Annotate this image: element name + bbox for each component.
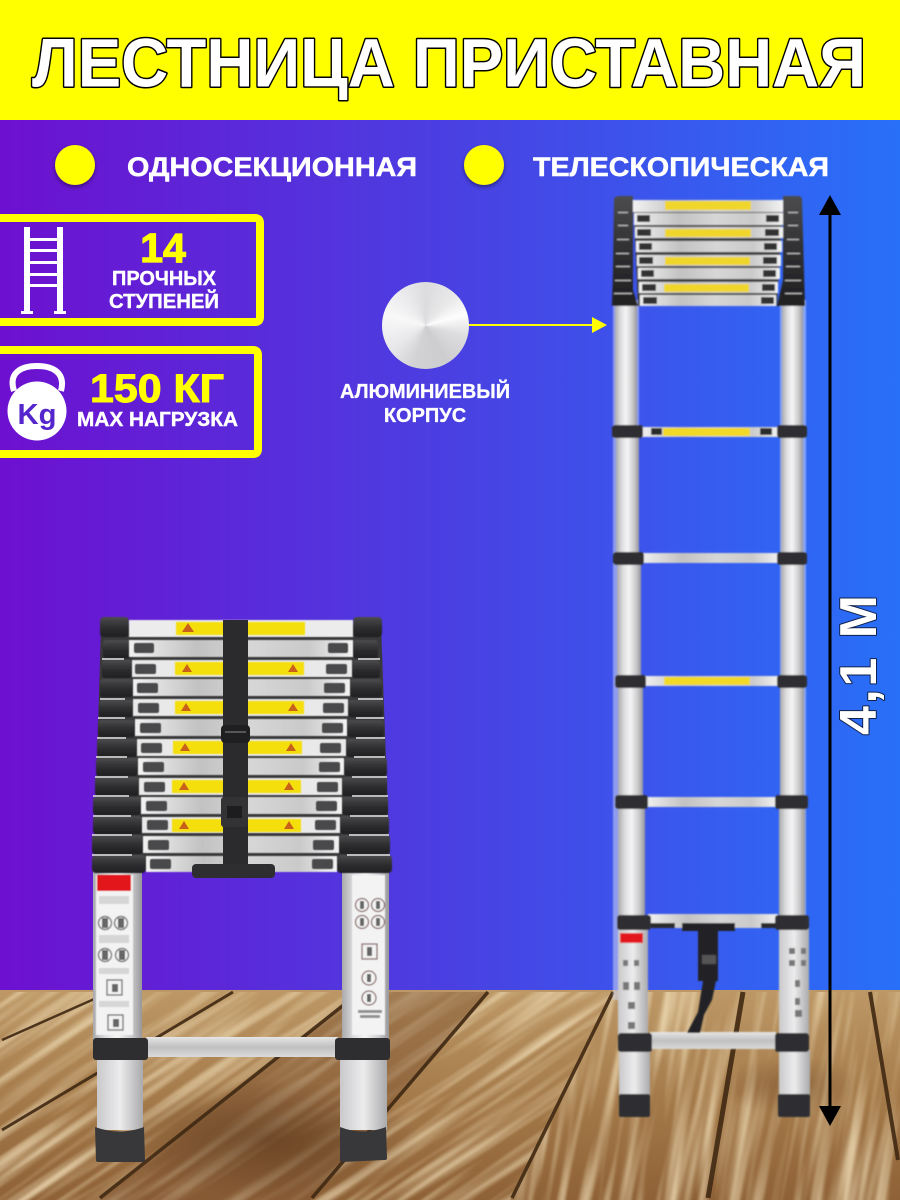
lower tubes [97,1058,387,1130]
title: ЛЕСТНИЦА ПРИСТАВНАЯ [32,24,866,102]
safety labels: right tube [352,875,385,1035]
dark backing behind the folded stack [94,625,390,870]
callout label: aluminium body: АЛЮМИНИЕВЫЙ [340,379,510,403]
icon: kettlebell [8,366,66,440]
top folded stack of rungs [612,196,805,306]
white outline glow [613,300,806,1000]
panel: 14 steps [0,218,260,322]
yellow warning stickers [172,622,305,832]
option: single section [55,145,417,185]
folded ladder (left) [92,617,392,1162]
safety labels: left tube [96,875,133,1035]
safety labels [620,933,806,1029]
clamps [612,425,809,1052]
callout label: aluminium body: КОРПУС [384,405,466,427]
cap highlights [92,658,390,856]
height dimension arrow [819,195,841,1126]
height label: 4,1 М [830,595,888,735]
clamps [93,1038,390,1060]
hanging strap [682,923,735,1033]
lower rung [650,1032,776,1049]
wooden floor [0,990,900,1200]
rungs [640,427,780,928]
option: single section: ОДНОСЕКЦИОННАЯ [127,152,417,182]
callout label: aluminium body [340,379,510,427]
rungs [129,620,353,872]
tubes [615,305,810,1095]
rung grips [134,643,348,869]
side caps left [92,617,146,873]
label: max load: МАХ НАГРУЗКА [77,409,238,431]
rubber feet [619,1094,810,1117]
carrying strap with buckles and handle [192,620,275,878]
label: strong steps: СТУПЕНЕЙ [109,289,219,313]
option: telescopic [464,145,829,185]
icon: ladder [21,227,66,314]
label: strong steps [109,268,219,313]
yellow stickers on rungs [663,428,750,685]
number 14: 14 [140,225,186,271]
bottom crossbar [146,1037,338,1057]
label: strong steps: ПРОЧНЫХ [112,268,217,290]
warning triangles [179,623,298,829]
icon: aluminium disc [382,282,469,369]
extended ladder (right) [612,196,810,1117]
rubber feet [95,1127,387,1162]
option: telescopic: ТЕЛЕСКОПИЧЕСКАЯ [533,152,829,182]
icon: kettlebell: Kg [18,399,56,431]
side caps right [337,617,392,873]
gradient background [0,120,900,995]
upper tubes [93,870,389,1040]
callout arrow: aluminium body [468,317,607,333]
value 150 kg: 150 КГ [90,367,224,411]
panel: max load [0,350,258,454]
rung grips [651,428,776,928]
title banner [0,0,900,120]
